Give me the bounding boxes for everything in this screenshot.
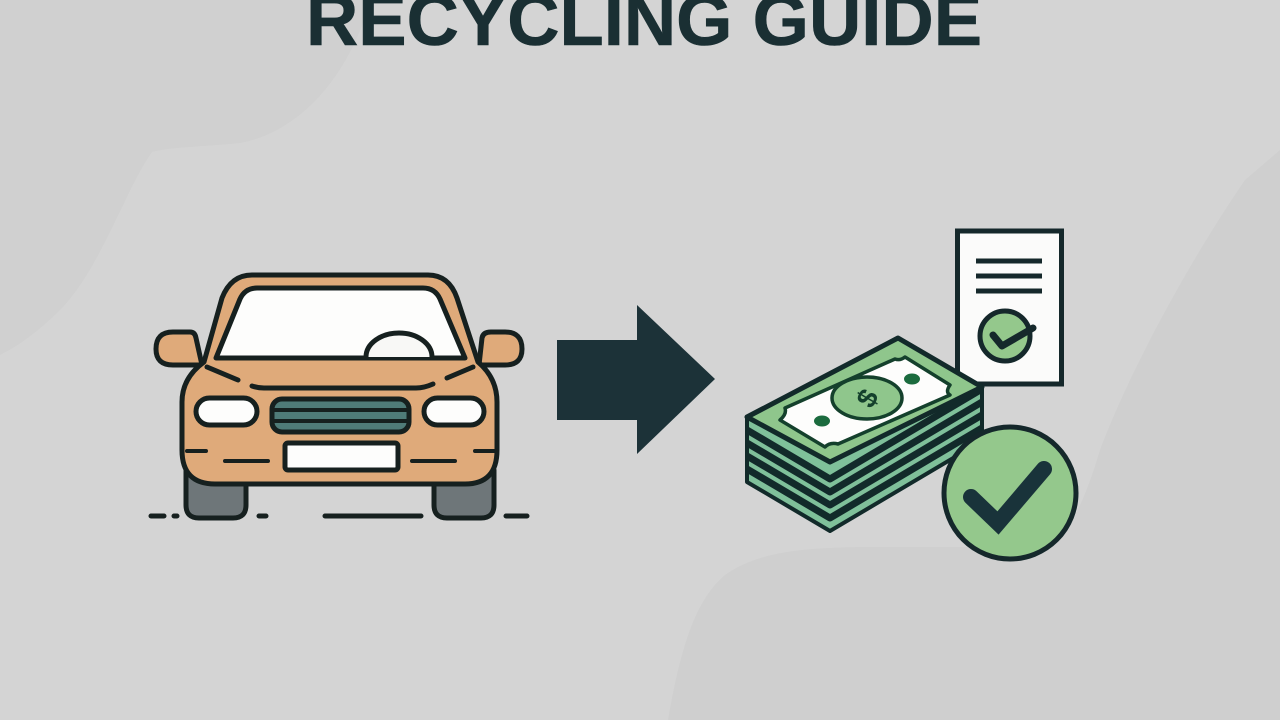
icon: stack of banknotes [747, 338, 982, 531]
hood line [207, 367, 473, 388]
icon: green check badge [944, 427, 1076, 559]
bumper lines [187, 451, 495, 461]
icon: document with check [958, 231, 1062, 384]
arrow [557, 305, 715, 454]
icon: stack of banknotes: $ [850, 383, 885, 413]
steering wheel [366, 333, 432, 357]
headlights [196, 398, 484, 425]
licence plate [285, 443, 398, 470]
tires [186, 470, 494, 518]
grille [272, 399, 409, 432]
icon: car front view [151, 275, 527, 518]
side mirrors [156, 332, 522, 365]
ground lines [151, 514, 527, 518]
car body [182, 275, 497, 484]
top banknote [747, 338, 982, 462]
windshield [216, 288, 465, 358]
